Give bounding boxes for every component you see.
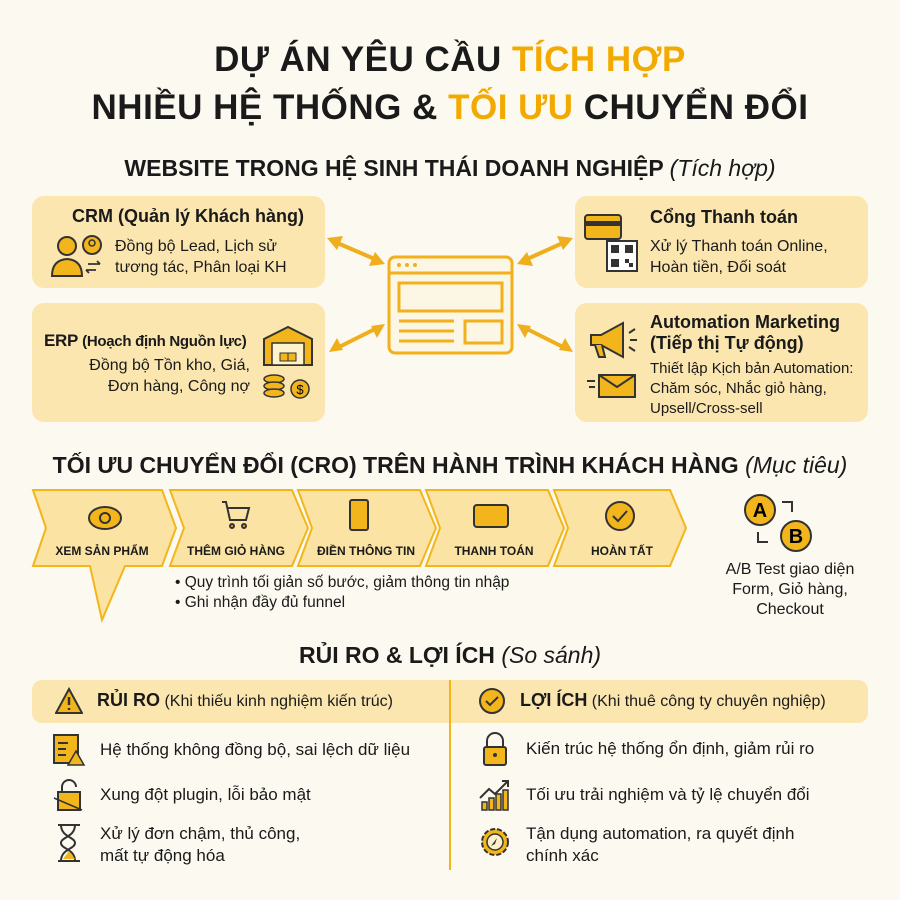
title <box>92 39 808 127</box>
panel: payment gateway <box>575 196 868 288</box>
text: A/B test <box>726 561 854 618</box>
icon: megaphone and mail <box>587 321 637 398</box>
icon: A/B test <box>744 494 812 552</box>
chart: funnel chevrons <box>32 489 687 624</box>
icon: card and QR <box>584 214 638 272</box>
list: risks: Hệ thống không đồng bộ, sai lệch dữ liệu <box>100 740 410 759</box>
panel: payment gateway: Cổng Thanh toán <box>650 207 798 227</box>
panel: automation marketing: Upsell/Cross-sell <box>650 400 763 417</box>
panel: automation marketing: Chăm sóc, Nhắc giỏ hàng, <box>650 380 827 397</box>
chart: funnel chevrons: HOÀN TẤT <box>591 543 654 558</box>
list: benefits: Kiến trúc hệ thống ổn định, giảm rủi ro <box>526 739 814 758</box>
list: benefits: Tận dụng automation, ra quyết định <box>526 824 794 843</box>
icon: users <box>51 235 102 277</box>
heading: website ecosystem: WEBSITE TRONG HỆ SINH THÁI DOANH NGHIỆP (Tích hợp) <box>124 155 776 181</box>
heading: CRO: TỐI ƯU CHUYỂN ĐỔI (CRO) TRÊN HÀNH TRÌNH KHÁCH HÀNG (Mục tiêu) <box>53 452 847 478</box>
panel: automation marketing <box>575 303 868 422</box>
panel: payment gateway: Xử lý Thanh toán Online, <box>650 238 828 255</box>
panel: CRM: CRM (Quản lý Khách hàng) <box>72 206 304 226</box>
icon: A/B test: B <box>789 526 803 548</box>
chart: funnel chevrons: THANH TOÁN <box>454 543 534 558</box>
panel: automation marketing: Automation Marketing <box>650 312 840 332</box>
icon: warehouse <box>263 326 313 399</box>
header: benefits <box>479 688 826 714</box>
panel: ERP: ERP (Hoạch định Nguồn lực) <box>44 331 246 350</box>
panel: ERP: Đơn hàng, Công nợ <box>108 378 250 395</box>
panel: comparison header <box>32 680 868 723</box>
arrows: integration <box>327 236 573 352</box>
icon: website browser <box>388 256 514 354</box>
list: risks: mất tự động hóa <box>100 846 225 865</box>
text: A/B test: Checkout <box>756 601 824 618</box>
header: risks: RỦI RO (Khi thiếu kinh nghiệm kiến trúc) <box>97 690 393 710</box>
panel: CRM: Đồng bộ Lead, Lịch sử <box>115 238 277 255</box>
text: funnel notes: • Ghi nhận đầy đủ funnel <box>175 594 345 611</box>
panel: CRM: tương tác, Phân loại KH <box>115 259 287 276</box>
chart: funnel chevrons: XEM SẢN PHẨM <box>55 543 149 558</box>
panel: payment gateway: Hoàn tiền, Đối soát <box>650 259 786 276</box>
icon: warehouse: $ <box>296 382 304 397</box>
chart: funnel chevrons: ĐIỀN THÔNG TIN <box>317 543 415 558</box>
panel: automation marketing: (Tiếp thị Tự động) <box>650 333 804 353</box>
heading: risks and benefits: RỦI RO & LỢI ÍCH (So sánh) <box>299 642 601 668</box>
panel: ERP <box>32 303 325 422</box>
list: risks: Xử lý đơn chậm, thủ công, <box>100 824 300 843</box>
text: A/B test: Form, Giỏ hàng, <box>732 581 848 598</box>
list: benefits: chính xác <box>526 846 599 865</box>
panel: CRM <box>32 196 325 288</box>
chart: funnel chevrons: THÊM GIỎ HÀNG <box>187 543 285 558</box>
icon: A/B test: A <box>753 500 767 522</box>
list: risks: Xung đột plugin, lỗi bảo mật <box>100 785 311 804</box>
title: DỰ ÁN YÊU CẦU TÍCH HỢP <box>214 40 686 79</box>
title: NHIỀU HỆ THỐNG & TỐI ƯU CHUYỂN ĐỔI <box>92 88 808 127</box>
panel: automation marketing: Thiết lập Kịch bản Automation: <box>650 360 853 377</box>
header: risks <box>55 687 393 714</box>
text: funnel notes <box>175 574 509 611</box>
list: benefits: Tối ưu trải nghiệm và tỷ lệ chuyển đổi <box>526 785 810 804</box>
divider <box>449 680 451 870</box>
text: A/B test: A/B Test giao diện <box>726 561 854 578</box>
text: funnel notes: • Quy trình tối giản số bước, giảm thông tin nhập <box>175 574 509 591</box>
panel: ERP: Đồng bộ Tồn kho, Giá, <box>89 357 250 374</box>
header: benefits: LỢI ÍCH (Khi thuê công ty chuyên nghiệp) <box>520 690 826 710</box>
